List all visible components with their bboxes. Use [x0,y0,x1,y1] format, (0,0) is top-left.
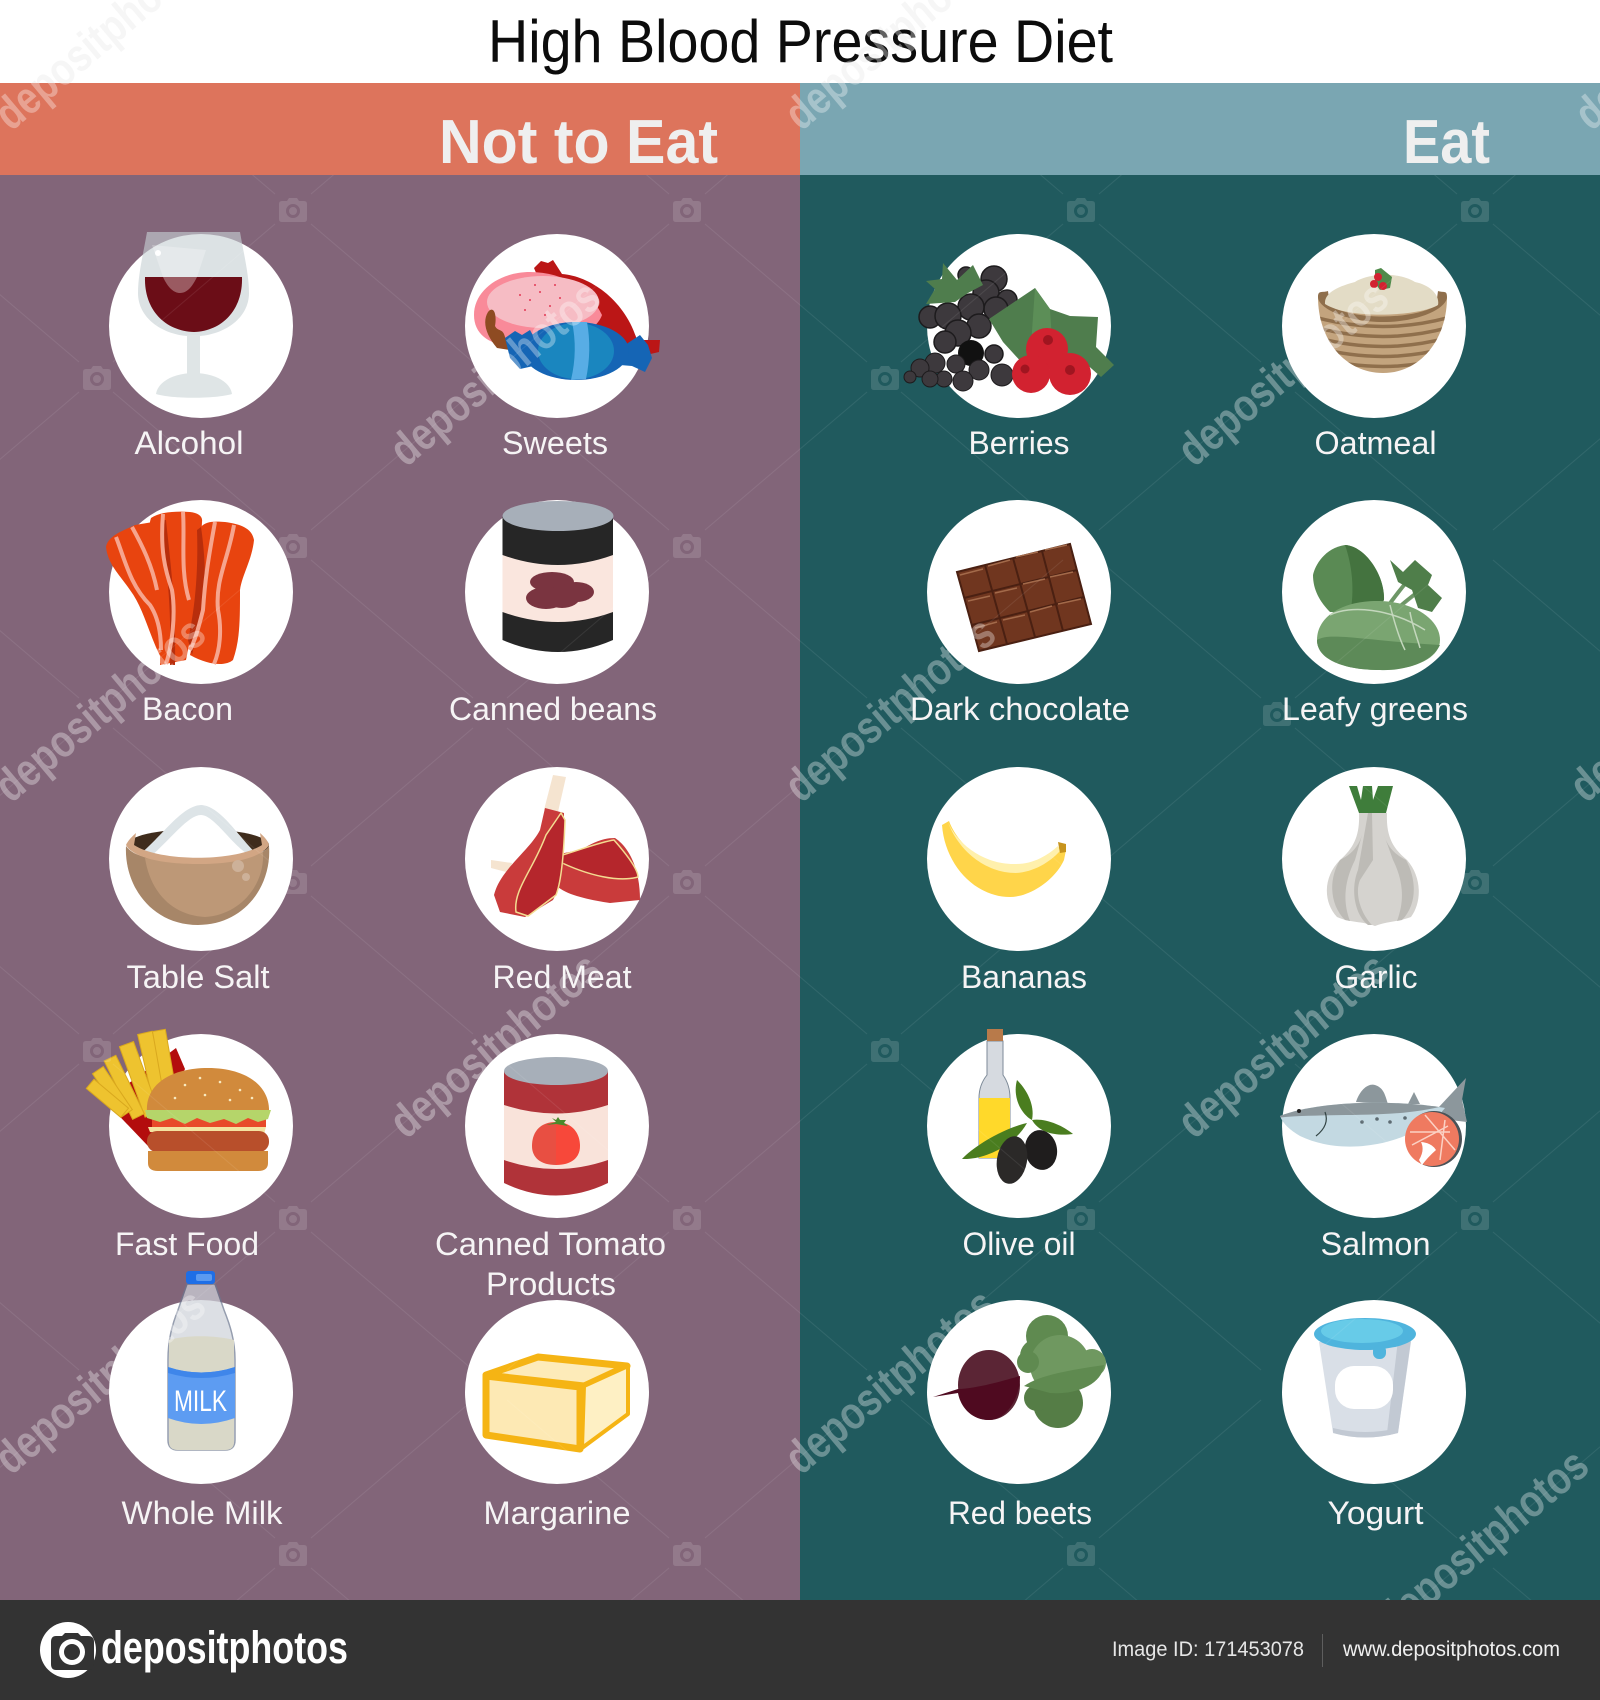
item: Bacon [106,500,293,727]
icon: oatmeal [1318,268,1447,373]
icon: yogurt [1314,1318,1416,1438]
item: Table Salt [109,767,293,995]
label: Dark chocolate [910,691,1130,727]
website url: www.depositphotos.com [1342,1638,1560,1661]
item: Oatmeal [1282,234,1466,461]
label: Bacon [142,691,233,727]
item: Leafy greens [1282,500,1468,727]
item: Sweets [465,234,660,461]
item: Canned beans [449,500,657,727]
icon: bananas [942,821,1066,897]
heading band: eat: Eat [1403,108,1490,177]
icon: red beets [933,1315,1106,1428]
panel background: not to eat [0,175,800,1600]
footer bar [0,1600,1600,1700]
label: Red Meat [492,959,632,995]
label: Olive oil [962,1226,1076,1262]
label: Margarine [484,1495,630,1531]
watermark overlay: depositphotos [1167,270,1398,476]
label: Canned Tomato [435,1226,666,1262]
label: Leafy greens [1282,691,1468,727]
label: Bananas [961,959,1087,995]
panel background: eat [800,175,1600,1600]
item: Garlic [1282,767,1466,995]
item: Berries [904,234,1114,461]
label line two: Products [486,1266,616,1302]
watermark overlay: depositphotos [1167,942,1398,1148]
item: Olive oil [927,1029,1111,1262]
item: Alcohol [109,232,293,461]
item: Salmon [1275,1034,1467,1262]
heading band: not to eat: Not to Eat [439,108,718,177]
heading band: eat [800,83,1600,177]
icon: red meat [491,775,640,917]
icon: canned tomato [504,1057,608,1196]
icon: olive oil [962,1029,1073,1186]
label: Table Salt [126,959,270,995]
item: Bananas [927,767,1111,995]
image id: Image ID: 171453078 [1112,1638,1304,1661]
icon: milk bottle [168,1271,235,1450]
icon: wine glass [138,232,249,398]
panel: not to eat [0,83,800,1600]
item: Canned Tomato Products [435,1034,666,1302]
icon: table salt [126,805,269,925]
icon: canned beans [502,501,614,666]
item: Red Meat [465,767,649,995]
label: Whole Milk [122,1495,284,1531]
watermark overlay: depositphotos [774,1278,1005,1484]
icon: leafy greens [1313,545,1442,670]
item: Yogurt [1282,1300,1466,1531]
icon: milk bottle: MILK [174,1385,227,1418]
heading band: not to eat [0,83,800,177]
label: Canned beans [449,691,657,727]
footer logo [40,1622,96,1678]
icon: salmon [1275,1078,1467,1167]
footer wordmark: depositphotos [101,1622,348,1673]
label: Oatmeal [1314,425,1436,461]
item: Whole Milk [109,1271,293,1531]
label: Fast Food [115,1226,259,1262]
label: Red beets [948,1495,1092,1531]
item: Fast Food [86,1029,293,1262]
watermark overlay: depositphotos [379,942,610,1148]
title: High Blood Pressure Diet [488,8,1113,75]
panel: eat [800,83,1600,1600]
icon: fast food [86,1029,271,1171]
label: Salmon [1320,1226,1430,1262]
watermark overlay: depositphotos [379,270,610,476]
icon: margarine [486,1357,628,1449]
label: Garlic [1334,959,1418,995]
label: Berries [968,425,1070,461]
watermark overlay: depositphotos [774,606,1005,812]
label: Sweets [502,425,608,461]
icon: garlic [1327,786,1419,926]
item: Margarine [465,1300,649,1531]
label: Alcohol [134,425,244,461]
icon: berries [904,263,1114,395]
icon: bacon [106,512,254,665]
label: Yogurt [1328,1495,1424,1531]
item: Red beets [927,1300,1111,1531]
icon: dark chocolate [957,544,1091,651]
item: Dark chocolate [910,500,1130,727]
icon: sweets [474,260,660,380]
